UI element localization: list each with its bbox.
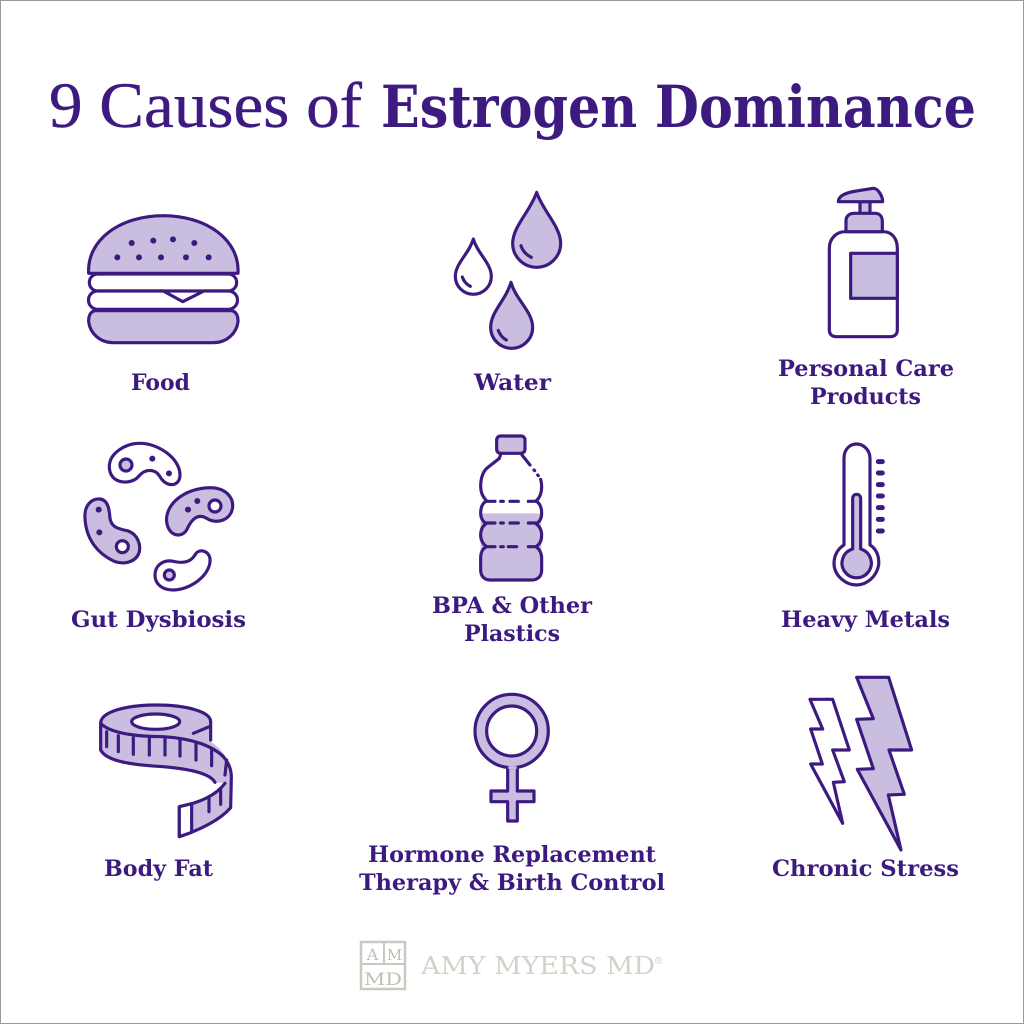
label: water: Water — [473, 370, 551, 396]
label: food: Food — [131, 370, 190, 396]
icon: venus symbol — [475, 694, 548, 821]
label: heavy metals: Heavy Metals — [781, 607, 950, 633]
label: gut dysbiosis: Gut Dysbiosis — [71, 607, 246, 633]
title: 9 Causes of — [49, 70, 362, 142]
logo: AM MD mark — [361, 942, 405, 990]
label: hormone replacement therapy and birth control — [359, 842, 665, 896]
icon: measuring tape — [101, 705, 231, 837]
label: personal care products — [778, 356, 954, 410]
label: bpa and other plastics: BPA & Other — [432, 593, 592, 619]
title — [49, 70, 976, 142]
icon: plastic bottle — [481, 436, 542, 580]
icon: lightning bolts — [810, 677, 912, 850]
logo: wordmark: ® — [655, 956, 663, 967]
icon: thermometer — [834, 444, 882, 585]
label: bpa and other plastics: Plastics — [464, 621, 560, 647]
label: personal care products: Personal Care — [778, 356, 954, 382]
logo: wordmark: AMY MYERS MD — [420, 952, 655, 980]
label: chronic stress: Chronic Stress — [772, 856, 959, 882]
icon: burger — [88, 216, 238, 343]
logo: AM MD mark: MD — [364, 970, 402, 990]
label: hormone replacement therapy and birth control: Therapy & Birth Control — [359, 870, 665, 896]
icon: pump bottle — [829, 188, 897, 337]
label: bpa and other plastics — [432, 593, 592, 647]
label: personal care products: Products — [810, 384, 921, 410]
logo: AM MD mark: A — [366, 945, 379, 964]
icon: water drops — [455, 192, 561, 348]
label: body fat: Body Fat — [104, 856, 214, 882]
label: hormone replacement therapy and birth control: Hormone Replacement — [368, 842, 657, 868]
logo: AM MD mark: M — [387, 946, 402, 964]
icon: gut bacteria — [85, 443, 233, 590]
